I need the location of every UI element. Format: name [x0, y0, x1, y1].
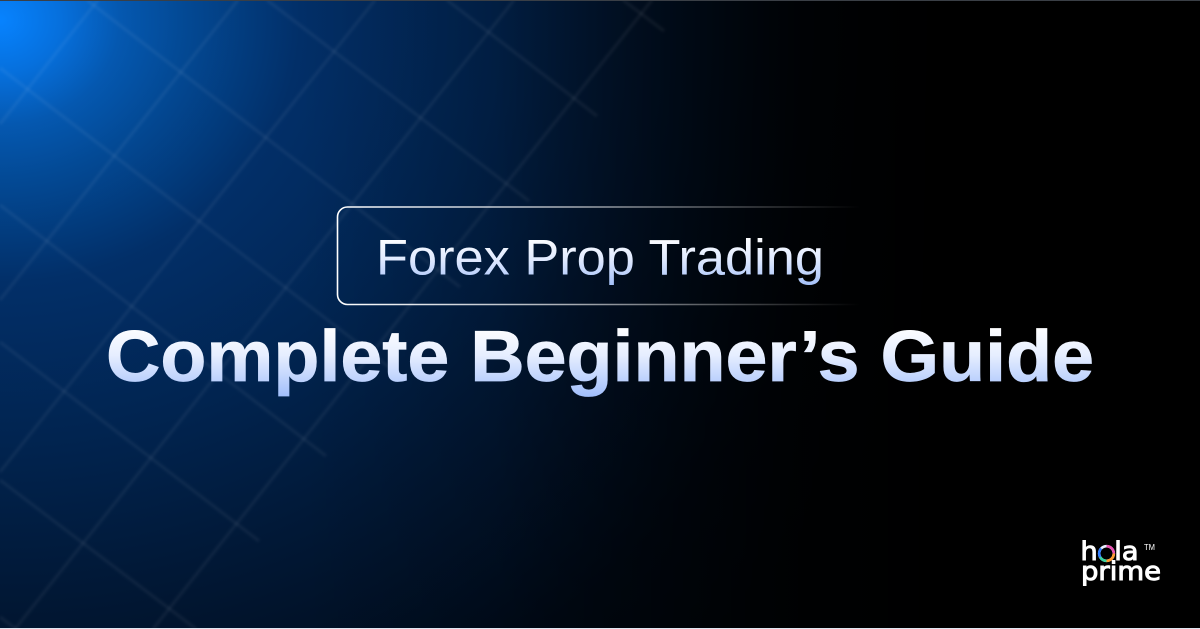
logo wordmark bottom line: prime: [1081, 557, 1161, 587]
logo colour ring: [1099, 546, 1114, 561]
logo: hola prime: [1080, 537, 1161, 587]
subtitle text: Forex Prop Trading: [376, 230, 824, 286]
subtitle panel: [338, 207, 938, 304]
logo wordmark top line: hola: [1080, 537, 1138, 567]
panel outline fading to the right: [338, 207, 938, 304]
title: Complete Beginner’s Guide: [106, 317, 1094, 397]
trademark mark: TM: [1144, 543, 1155, 552]
